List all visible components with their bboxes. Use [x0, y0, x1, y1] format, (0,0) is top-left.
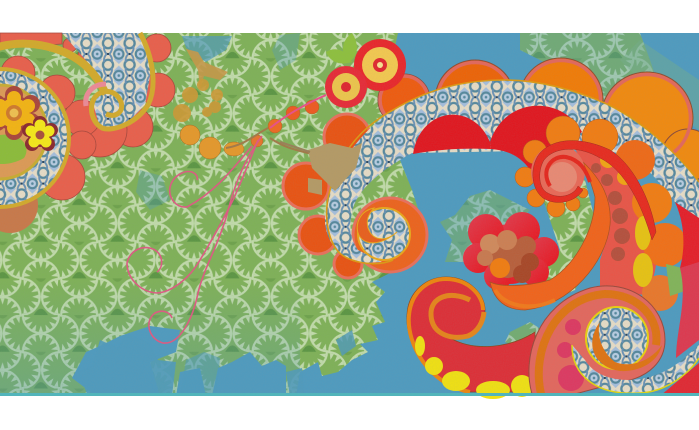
- left salmon lobes: [0, 33, 175, 200]
- muted brown lobe: [0, 177, 38, 233]
- dark beads: [591, 163, 630, 261]
- yellow outline arc: [572, 345, 699, 393]
- brown tendril: [226, 128, 312, 154]
- tile disc: [586, 307, 648, 369]
- flowers at top center: [325, 33, 406, 108]
- lobe: [519, 58, 603, 142]
- salmon outline on top lobes: [380, 60, 690, 162]
- brown inner flower: [477, 230, 539, 283]
- lower yellow coil: [337, 250, 393, 264]
- leaves: [326, 33, 357, 64]
- main tile arc: [325, 80, 699, 263]
- pink swirl center: [547, 162, 577, 192]
- red body: [572, 142, 657, 295]
- flower: small yellow: [22, 116, 58, 151]
- orange crescent: [490, 162, 610, 310]
- flower: large yellow: [0, 86, 40, 140]
- small orange curl end: [490, 258, 510, 278]
- muted tail of crescent: [495, 290, 555, 306]
- inner salmon and olive rings: [0, 85, 47, 179]
- left scallops of main arc: [283, 114, 370, 278]
- red swirl ring: [533, 141, 656, 240]
- pink curl: [86, 84, 106, 106]
- red flower: [463, 212, 559, 290]
- salmon swirl body: [531, 145, 585, 199]
- blue wash over lower pattern: [0, 280, 300, 396]
- right orange lobes above the arc: [378, 58, 699, 181]
- lobe: [601, 72, 693, 164]
- yellow edge of arc: [327, 80, 699, 250]
- yellow spiral outline: [91, 33, 153, 129]
- orange spiral stripe: [409, 279, 483, 392]
- orange scallop chain with bird: [173, 49, 326, 159]
- tile center: [358, 208, 410, 260]
- inner red curl: [546, 157, 590, 186]
- large spiral disc: [529, 286, 665, 394]
- orange spiral ring: [353, 198, 427, 272]
- golden curl lobes: [173, 79, 223, 122]
- yellow curling band: [0, 44, 106, 94]
- inner orange crescent: [592, 322, 662, 371]
- right paisley body: [490, 140, 699, 358]
- lobe: [435, 60, 515, 140]
- upper paisley swirl with petals: [515, 116, 656, 240]
- icon: brown bird: [186, 49, 228, 90]
- orange chain lobes: [180, 100, 319, 159]
- lower right tile band: [572, 345, 699, 393]
- bottom right spiral: [529, 286, 699, 396]
- lower left red paisley: [407, 277, 535, 399]
- inner crescent: [357, 208, 397, 243]
- yellow scallops right: [600, 152, 653, 287]
- large red flower: [354, 39, 406, 91]
- blue paint blotches over the pattern: [78, 33, 356, 396]
- pink looping lines: [127, 136, 262, 343]
- orange inner curl: [431, 295, 484, 337]
- brown torn patch: [280, 142, 362, 195]
- lobe: [662, 129, 699, 181]
- spiral disc and tail: [407, 277, 535, 392]
- red half scallops: [413, 106, 582, 170]
- green patch right: [666, 264, 688, 296]
- red lower corner: [660, 363, 699, 396]
- left paisley: [0, 33, 175, 233]
- red panels at far right: [675, 202, 699, 268]
- orange lobes right: [615, 140, 687, 311]
- pink inner lobes: [557, 319, 584, 391]
- lobe: [378, 74, 430, 126]
- orange petals: [515, 116, 618, 217]
- teal stitched bottom edge: [0, 393, 699, 396]
- left tile disc with yellow ring: [0, 69, 69, 207]
- pink stem: [270, 95, 326, 128]
- small red flower: [325, 66, 367, 108]
- left arc spiral: [337, 208, 410, 264]
- orange ring: [539, 294, 657, 394]
- green leaf: [0, 135, 27, 164]
- left tile teardrop: [62, 33, 151, 128]
- yellow scallops: [415, 336, 533, 399]
